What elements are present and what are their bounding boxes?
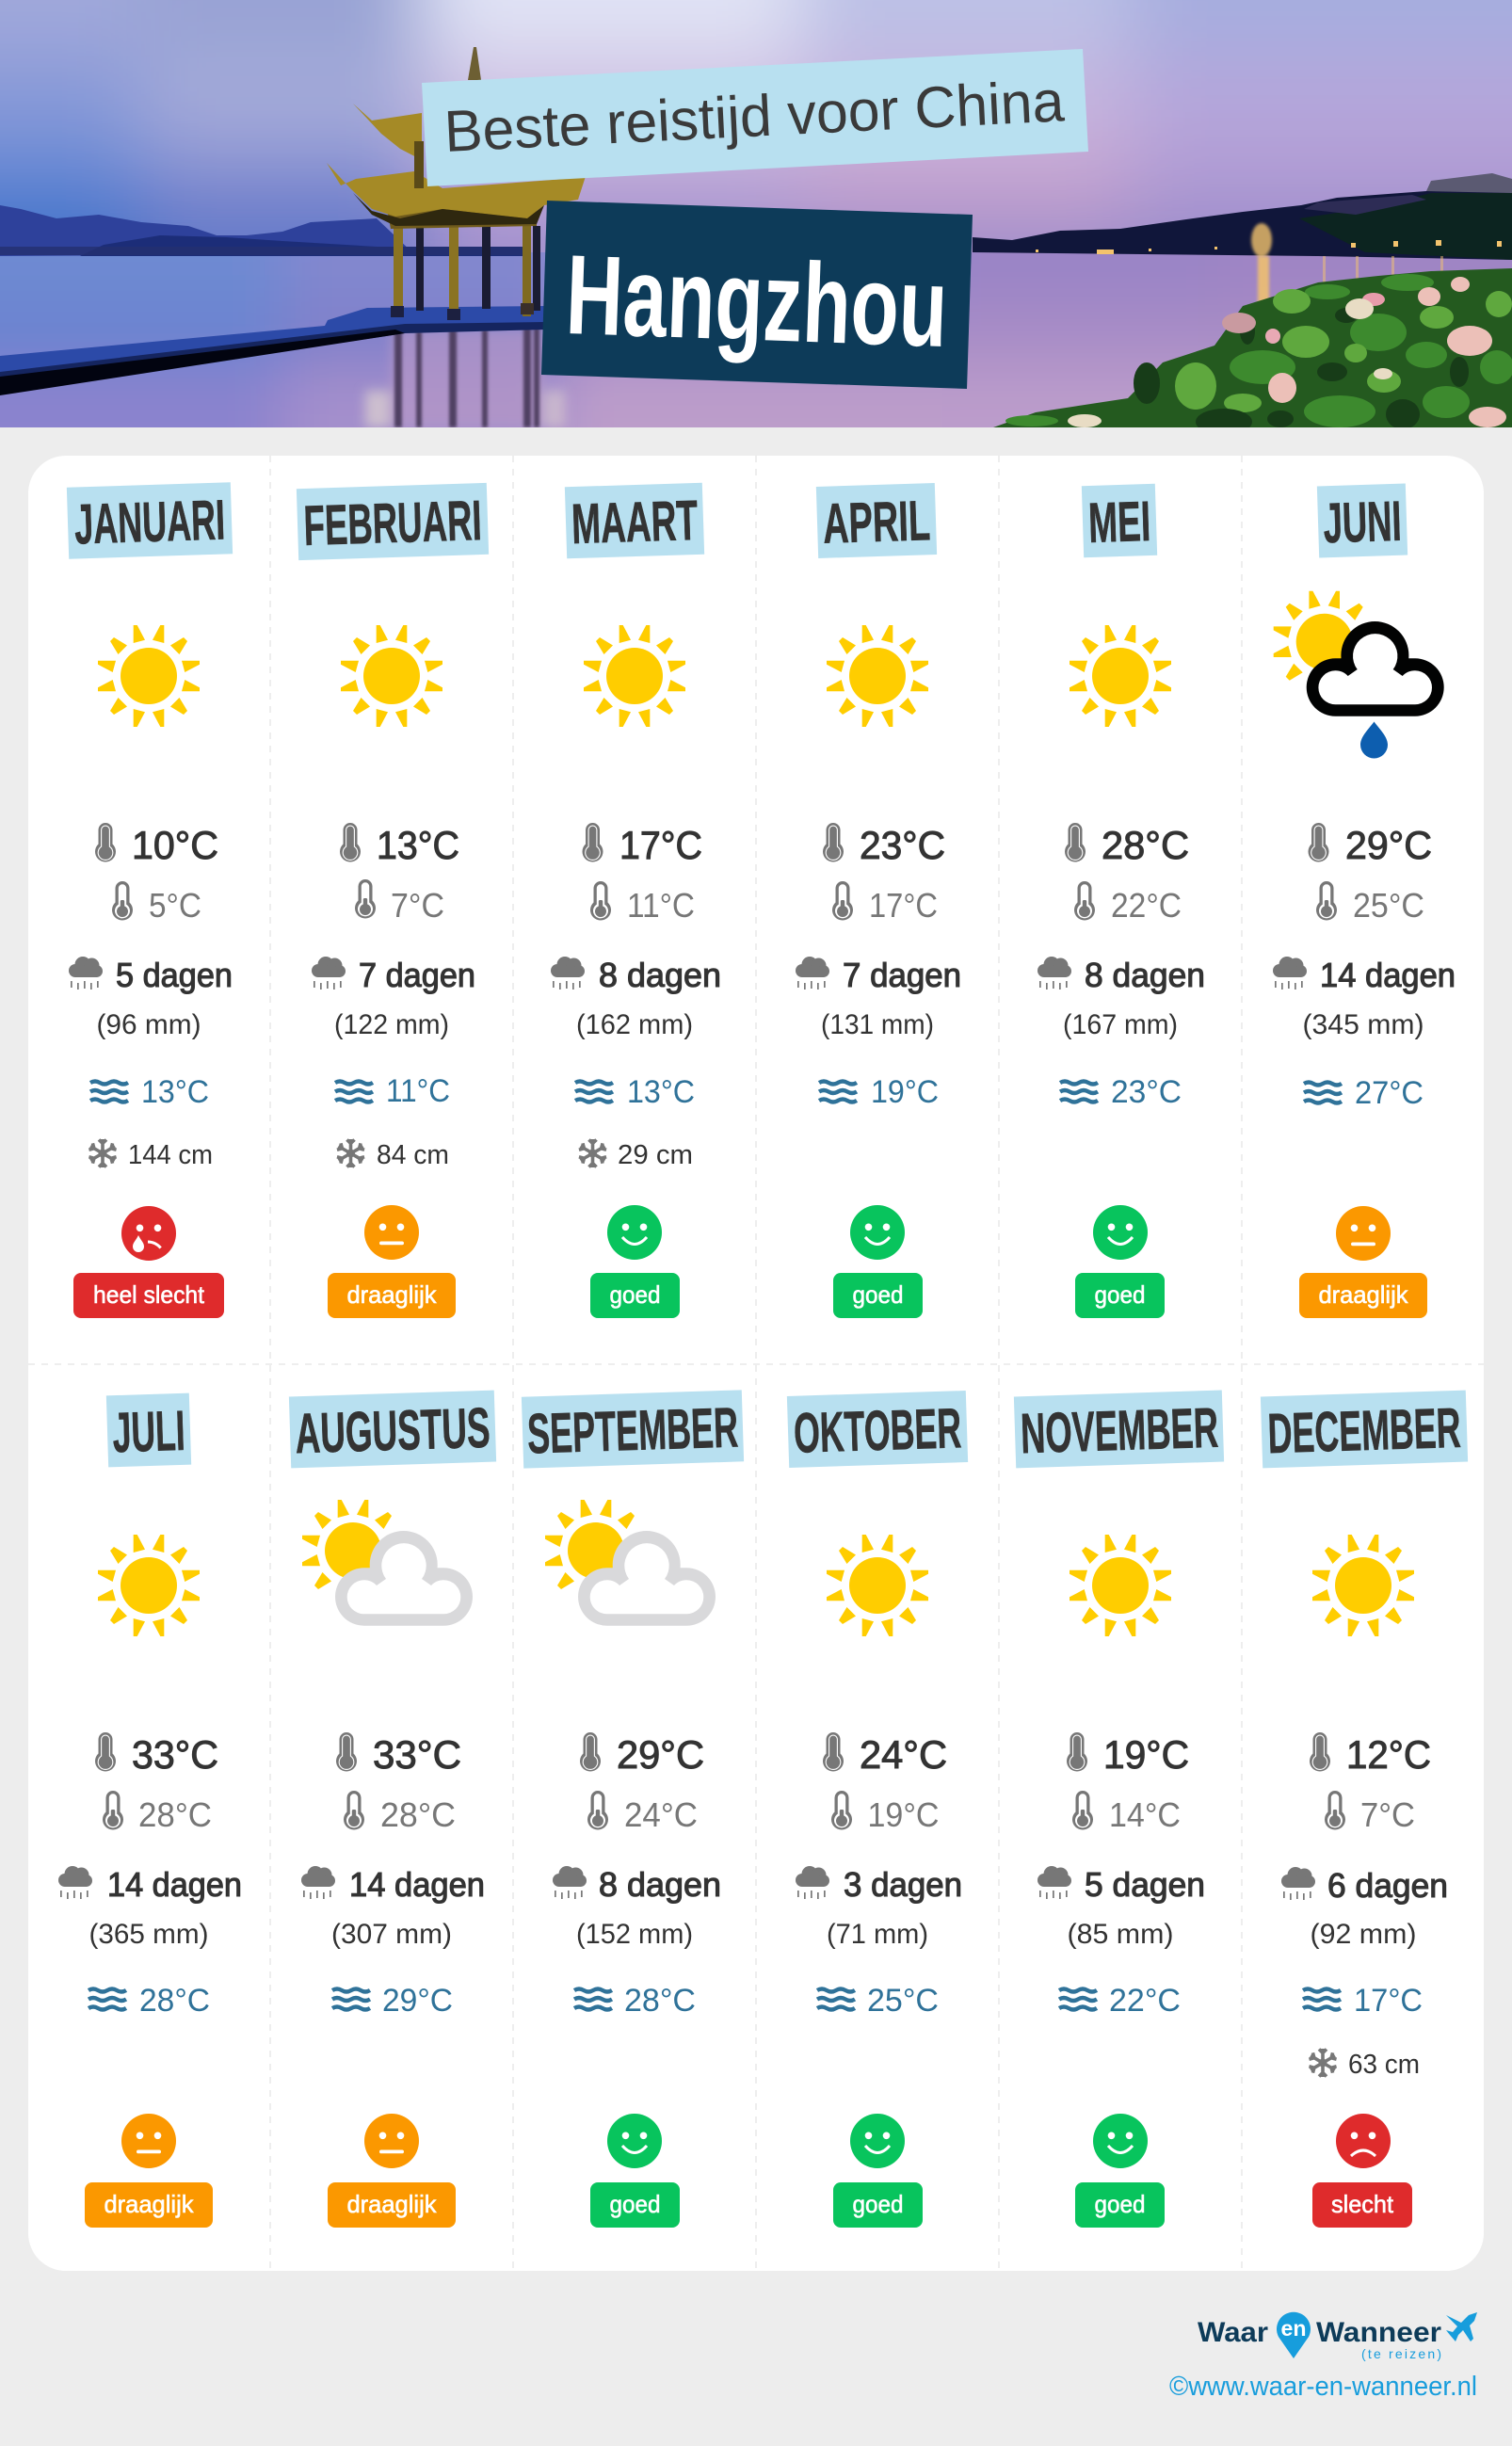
rating face	[607, 1205, 662, 1260]
rating pill	[833, 2182, 923, 2228]
rating pill: draaglijk	[346, 2190, 437, 2218]
rain days: 14 dagen	[107, 1865, 242, 1904]
rating pill: draaglijk	[1318, 1280, 1408, 1309]
website url: ©www.waar-en-wanneer.nl	[1169, 2372, 1477, 2402]
max temperature	[340, 823, 459, 867]
rating pill	[833, 1273, 923, 1318]
month label: augustus	[289, 1391, 496, 1468]
min temperature: 5°C	[149, 886, 201, 925]
max temperature: 33°C	[132, 1732, 218, 1777]
rain days: 8 dagen	[599, 1865, 721, 1904]
column: februari	[297, 483, 489, 1318]
max temperature: 19°C	[1103, 1732, 1189, 1777]
sea temperature: 19°C	[871, 1074, 939, 1110]
rainfall: (131 mm)	[821, 1009, 934, 1040]
max temperature	[95, 823, 218, 867]
pier	[0, 306, 546, 392]
month label: januari: JANUARI	[73, 489, 226, 555]
rating pill: draaglijk	[346, 1280, 437, 1309]
min temperature: 17°C	[869, 886, 938, 925]
sea temperature	[332, 1983, 453, 2019]
rating pill: heel slecht	[93, 1280, 205, 1309]
sea temperature: 17°C	[1354, 1983, 1423, 2019]
icon: sun	[1312, 1535, 1414, 1636]
rating face	[364, 2114, 419, 2168]
title banner: Hangzhou: Hangzhou	[564, 232, 950, 371]
column: oktober	[787, 1391, 968, 2228]
sea temperature	[1060, 1074, 1182, 1110]
rating face	[850, 1205, 905, 1260]
sea temperature: 23°C	[1111, 1074, 1182, 1110]
month label: juli	[106, 1393, 191, 1467]
rainfall: (85 mm)	[1068, 1919, 1173, 1950]
min temperature: 7°C	[391, 886, 444, 925]
rainfall: (167 mm)	[1063, 1009, 1178, 1040]
logo: Waar en Wanneer: Wanneer	[1316, 2317, 1441, 2348]
icon: sun behind grey cloud	[545, 1500, 716, 1626]
month label: juli: JULI	[112, 1399, 186, 1464]
sea temperature: 29°C	[382, 1983, 453, 2019]
min temperature	[344, 1791, 456, 1834]
month label: januari	[67, 482, 233, 559]
snow: 144 cm	[128, 1140, 213, 1170]
column: juli	[58, 1393, 242, 2228]
rain days: 14 dagen	[349, 1865, 485, 1904]
sea temperature	[574, 1983, 696, 2019]
header photo: west lake with pagoda	[0, 0, 1512, 565]
column: mei	[1037, 484, 1205, 1318]
rating face	[1336, 1206, 1391, 1261]
sea temperature	[90, 1074, 209, 1110]
sea temperature: 13°C	[141, 1074, 209, 1110]
column: maart	[551, 483, 721, 1318]
rating pill	[73, 1273, 224, 1318]
rain days: 5 dagen	[1085, 1865, 1205, 1904]
icon: sun, cloud and rain drop	[1274, 591, 1444, 759]
max temperature	[1309, 823, 1432, 867]
max temperature: 24°C	[860, 1732, 947, 1777]
snow	[88, 1139, 213, 1170]
rain days: 6 dagen	[1327, 1866, 1448, 1905]
rainfall: (122 mm)	[334, 1009, 449, 1040]
rating pill: goed	[1094, 2190, 1145, 2218]
rating pill: slecht	[1331, 2190, 1394, 2218]
rating face	[1336, 2114, 1391, 2168]
logo: Waar en Wanneer: en	[1280, 2316, 1307, 2341]
rain days	[796, 956, 961, 994]
rain days: 8 dagen	[599, 956, 721, 994]
rain days	[69, 956, 233, 994]
month label: september: SEPTEMBER	[526, 1395, 739, 1466]
rating pill	[85, 2182, 213, 2228]
min temperature	[1072, 1791, 1181, 1834]
snow: 84 cm	[377, 1140, 449, 1170]
max temperature: 12°C	[1346, 1732, 1431, 1777]
rain days	[312, 956, 475, 994]
rating pill	[1075, 1273, 1165, 1318]
min temperature: 22°C	[1111, 886, 1182, 925]
rainfall: (162 mm)	[576, 1009, 693, 1040]
sea temperature	[575, 1074, 695, 1110]
month label: juni: JUNI	[1323, 490, 1403, 555]
month label: maart: MAART	[571, 489, 699, 555]
min temperature: 28°C	[138, 1795, 212, 1834]
month label: februari	[297, 483, 489, 560]
rating face	[121, 1206, 176, 1261]
title banner: Beste reistijd voor China	[422, 49, 1088, 186]
title banner: Hangzhou	[541, 201, 973, 389]
min temperature	[112, 881, 201, 925]
icon: sun behind grey cloud	[302, 1500, 473, 1626]
sea temperature: 11°C	[386, 1073, 450, 1109]
max temperature: 17°C	[619, 823, 702, 867]
month label: november	[1014, 1391, 1224, 1468]
max temperature: 28°C	[1102, 823, 1189, 867]
rainfall: (152 mm)	[576, 1919, 693, 1950]
rating pill: goed	[853, 1280, 904, 1309]
icon: sun	[584, 625, 685, 727]
rating pill: goed	[853, 2190, 904, 2218]
min temperature	[103, 1791, 212, 1834]
rating face	[850, 2114, 905, 2168]
logo: Waar en Wanneer	[1198, 2312, 1477, 2361]
rating pill	[1075, 2182, 1165, 2228]
min temperature	[355, 879, 444, 925]
snow	[337, 1139, 449, 1170]
rain days: 14 dagen	[1320, 956, 1456, 994]
icon: sun	[827, 1535, 928, 1636]
rainfall: (307 mm)	[331, 1919, 452, 1950]
sea temperature	[1059, 1983, 1181, 2019]
icon: sun	[341, 625, 442, 727]
rainfall: (71 mm)	[827, 1919, 928, 1950]
max temperature	[1310, 1732, 1431, 1777]
sea temperature	[819, 1074, 939, 1110]
sea temperature: 28°C	[139, 1983, 210, 2019]
rating pill	[328, 1273, 456, 1318]
rating face	[607, 2114, 662, 2168]
lotus plants	[993, 268, 1512, 427]
month label: juni	[1317, 484, 1407, 557]
rating pill: goed	[610, 2190, 661, 2218]
min temperature	[831, 1791, 940, 1834]
sea temperature	[817, 1983, 939, 2019]
rain days	[796, 1865, 962, 1904]
rating face	[364, 1205, 419, 1260]
rating pill	[1299, 1273, 1427, 1318]
sea temperature: 13°C	[627, 1074, 695, 1110]
month label: mei	[1082, 484, 1157, 557]
max temperature	[95, 1732, 218, 1777]
min temperature	[1316, 881, 1424, 925]
sea temperature	[1303, 1983, 1423, 2019]
min temperature: 24°C	[624, 1795, 698, 1834]
snow	[579, 1139, 693, 1170]
max temperature	[823, 823, 945, 867]
rainfall: (365 mm)	[88, 1919, 209, 1950]
logo: Waar en Wanneer: Waar	[1198, 2317, 1268, 2348]
sea temperature: 22°C	[1109, 1983, 1181, 2019]
rating pill	[590, 2182, 680, 2228]
reflections of pagoda columns	[365, 330, 565, 427]
icon: sun	[827, 625, 928, 727]
min temperature	[832, 881, 938, 925]
sea temperature	[88, 1983, 210, 2019]
rating pill	[590, 1273, 680, 1318]
sea temperature	[335, 1073, 450, 1109]
icon: sun	[98, 625, 200, 727]
rainfall: (345 mm)	[1303, 1009, 1424, 1040]
column: juni	[1273, 484, 1456, 1318]
panel: months table	[28, 456, 1484, 2271]
month label: februari: FEBRUARI	[303, 489, 483, 557]
min temperature: 25°C	[1353, 886, 1424, 925]
pagoda roofs	[387, 198, 537, 229]
min temperature	[587, 1791, 698, 1834]
title banner: Beste reistijd voor China: Beste reistijd voor China	[442, 69, 1066, 165]
snow: 29 cm	[618, 1140, 693, 1170]
rating pill	[1312, 2182, 1412, 2228]
column: augustus	[289, 1391, 496, 2228]
icon: sun	[98, 1535, 200, 1636]
min temperature	[590, 881, 695, 925]
min temperature: 19°C	[868, 1795, 940, 1834]
month label: oktober: OKTOBER	[793, 1396, 962, 1465]
column: december	[1261, 1391, 1468, 2228]
rainfall: (96 mm)	[96, 1009, 201, 1040]
month label: oktober	[787, 1391, 968, 1468]
min temperature	[1074, 881, 1182, 925]
rating face	[1093, 2114, 1148, 2168]
snow: 63 cm	[1348, 2050, 1420, 2080]
month label: maart	[565, 483, 704, 558]
rain days: 7 dagen	[843, 956, 961, 994]
rating pill: draaglijk	[104, 2190, 194, 2218]
rain days: 7 dagen	[359, 956, 475, 994]
rating face	[1093, 1205, 1148, 1260]
icon: sun	[1070, 625, 1171, 727]
column: november	[1014, 1391, 1224, 2228]
min temperature	[1325, 1791, 1415, 1834]
sea temperature	[1304, 1075, 1424, 1111]
max temperature: 29°C	[1345, 823, 1432, 867]
column: januari	[67, 482, 233, 1318]
rain days: 5 dagen	[116, 956, 233, 994]
far shore	[973, 177, 1512, 260]
month label: mei: MEI	[1087, 490, 1151, 555]
snow	[1309, 2049, 1420, 2080]
rating face	[121, 2114, 176, 2168]
max temperature	[1067, 1732, 1189, 1777]
max temperature	[582, 823, 702, 867]
mountains	[0, 205, 414, 256]
max temperature: 33°C	[373, 1732, 461, 1777]
rating pill	[328, 2182, 456, 2228]
sea temperature: 27°C	[1355, 1075, 1424, 1111]
icon: sun	[1070, 1535, 1171, 1636]
sea temperature: 28°C	[624, 1983, 696, 2019]
sea temperature: 25°C	[867, 1983, 939, 2019]
min temperature: 14°C	[1109, 1795, 1181, 1834]
month label: november: NOVEMBER	[1020, 1396, 1219, 1465]
logo: Waar en Wanneer: (te reizen)	[1361, 2346, 1441, 2361]
month label: april: APRIL	[822, 489, 931, 555]
rain days: 8 dagen	[1085, 956, 1205, 994]
column: april	[796, 483, 961, 1318]
rain days: 3 dagen	[844, 1865, 962, 1904]
min temperature: 7°C	[1360, 1795, 1415, 1834]
lake water	[0, 252, 1512, 427]
min temperature: 28°C	[380, 1795, 456, 1834]
month label: april	[816, 483, 937, 558]
max temperature: 13°C	[377, 823, 459, 867]
month label: augustus: AUGUSTUS	[295, 1396, 491, 1465]
max temperature: 10°C	[132, 823, 218, 867]
min temperature: 11°C	[627, 886, 695, 925]
rainfall: (92 mm)	[1311, 1919, 1416, 1950]
pagoda columns	[391, 226, 540, 320]
month label: september	[522, 1390, 744, 1469]
column: september	[522, 1390, 744, 2228]
rating pill: goed	[1094, 1280, 1145, 1309]
max temperature: 23°C	[860, 823, 945, 867]
rating pill: goed	[610, 1280, 661, 1309]
max temperature: 29°C	[617, 1732, 704, 1777]
